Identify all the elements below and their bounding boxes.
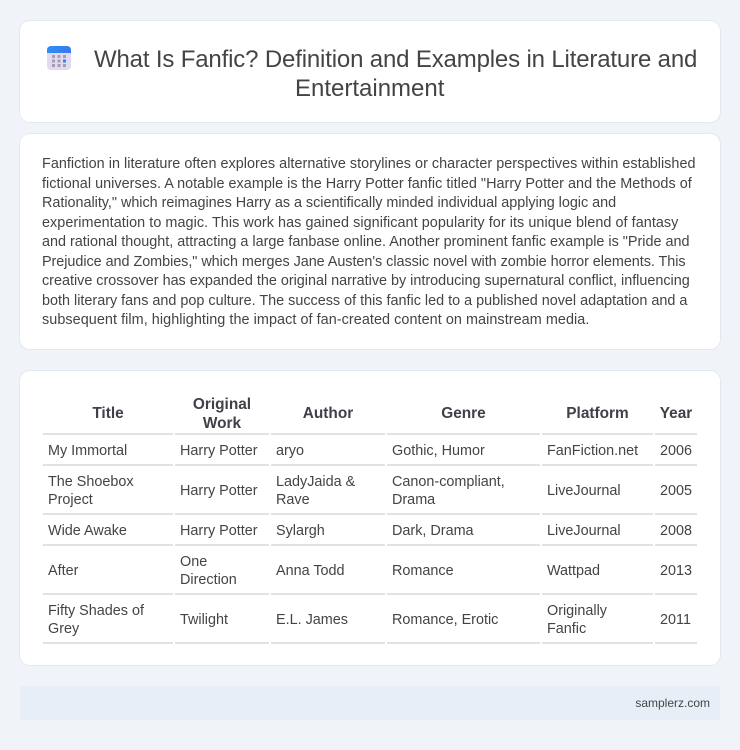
title: Entertainment <box>295 75 444 102</box>
text block: description: Rationality," which reimagines Harry as a scientifically minded individual applying logic and <box>42 195 616 211</box>
row: Fifty Shades of Grey: Twilight <box>180 612 228 628</box>
row: After: After <box>48 563 78 579</box>
row: Fifty Shades of Grey: 2011 <box>660 612 691 628</box>
row: After: Anna Todd <box>276 563 345 579</box>
row: The Shoebox Project: LiveJournal <box>547 483 621 499</box>
row: Fifty Shades of Grey <box>48 603 691 637</box>
text block: description: experimentation to magic. This work has gained significant popularity for its unique blend of fantasy <box>42 214 678 230</box>
row: Wide Awake: Sylargh <box>276 523 325 539</box>
table: fanfic examples <box>48 396 692 637</box>
row: Wide Awake: Dark, Drama <box>392 523 474 539</box>
row: My Immortal: Harry Potter <box>180 443 258 459</box>
row: Fifty Shades of Grey: Originally <box>547 603 607 619</box>
panel: title card <box>20 21 720 122</box>
row: Fifty Shades of Grey: Grey <box>48 621 79 637</box>
row: After: Romance <box>392 563 454 579</box>
row: My Immortal: aryo <box>276 443 304 459</box>
row: After: Wattpad <box>547 563 600 579</box>
row: After: 2013 <box>660 563 692 579</box>
row: Wide Awake <box>48 523 692 539</box>
table header: Title <box>92 405 124 422</box>
row: The Shoebox Project <box>48 474 692 508</box>
row: The Shoebox Project: 2005 <box>660 483 692 499</box>
table header: Year <box>660 405 692 422</box>
row: Fifty Shades of Grey: Romance, Erotic <box>392 612 498 628</box>
row: The Shoebox Project: Drama <box>392 492 435 508</box>
row: Fifty Shades of Grey: Fanfic <box>547 621 586 637</box>
row: My Immortal: FanFiction.net <box>547 443 638 459</box>
row: My Immortal: 2006 <box>660 443 692 459</box>
text block: description: and rational thought, attracting a large fanbase online. Another prominent fanfic example is "Pride and <box>42 234 690 250</box>
row: The Shoebox Project: Canon-compliant, <box>392 474 505 490</box>
row: The Shoebox Project: Harry Potter <box>180 483 258 499</box>
text block: description: fictional universes. A notable example is the Harry Potter fanfic titled "Harry Potter and the Methods of <box>42 176 692 192</box>
row: Wide Awake: 2008 <box>660 523 692 539</box>
row: Fifty Shades of Grey: E.L. James <box>276 612 348 628</box>
row: The Shoebox Project: LadyJaida & <box>276 474 355 490</box>
row: My Immortal: Gothic, Humor <box>392 443 485 459</box>
row: Wide Awake: LiveJournal <box>547 523 621 539</box>
text block: description: both literary fans and pop culture. The success of this fanfic led to a published novel adaptation and a <box>42 292 687 308</box>
panel: description <box>20 134 720 349</box>
row: My Immortal <box>48 443 692 459</box>
icon: calendar <box>47 46 71 70</box>
row: The Shoebox Project: Rave <box>276 492 310 508</box>
row: The Shoebox Project: The Shoebox <box>48 474 134 490</box>
footer bar <box>20 686 720 720</box>
text block: description: Fanfiction in literature often explores alternative storylines or character perspectives within established <box>42 156 696 172</box>
title <box>94 46 697 102</box>
row: Wide Awake: Harry Potter <box>180 523 258 539</box>
row: Fifty Shades of Grey: Fifty Shades of <box>48 603 144 619</box>
row: After <box>48 554 692 588</box>
text block: description: creative crossover has expanded the original narrative by introducing supernatural conflict, influencing <box>42 273 690 289</box>
text block: description: subsequent film, highlighting the impact of fan-created content on mainstream media. <box>42 312 589 328</box>
text block: description <box>42 156 696 328</box>
table header <box>92 396 692 432</box>
row: After: Direction <box>180 572 237 588</box>
footer text: samplerz.com <box>635 696 710 710</box>
table header: Genre <box>441 405 486 422</box>
row: After: One <box>180 554 207 570</box>
title: What Is Fanfic? Definition and Examples in Literature and <box>94 46 697 73</box>
text block: description: Prejudice and Zombies," which merges Jane Austen's classic novel with zombie horror elements. This <box>42 254 686 270</box>
row: The Shoebox Project: Project <box>48 492 93 508</box>
panel: table card <box>20 371 720 665</box>
table header: Original <box>193 396 251 412</box>
table header: Work <box>203 414 241 432</box>
row: My Immortal: My Immortal <box>48 443 127 459</box>
row: Wide Awake: Wide Awake <box>48 523 127 539</box>
table header: Platform <box>566 405 629 422</box>
table header: Author <box>303 405 353 422</box>
